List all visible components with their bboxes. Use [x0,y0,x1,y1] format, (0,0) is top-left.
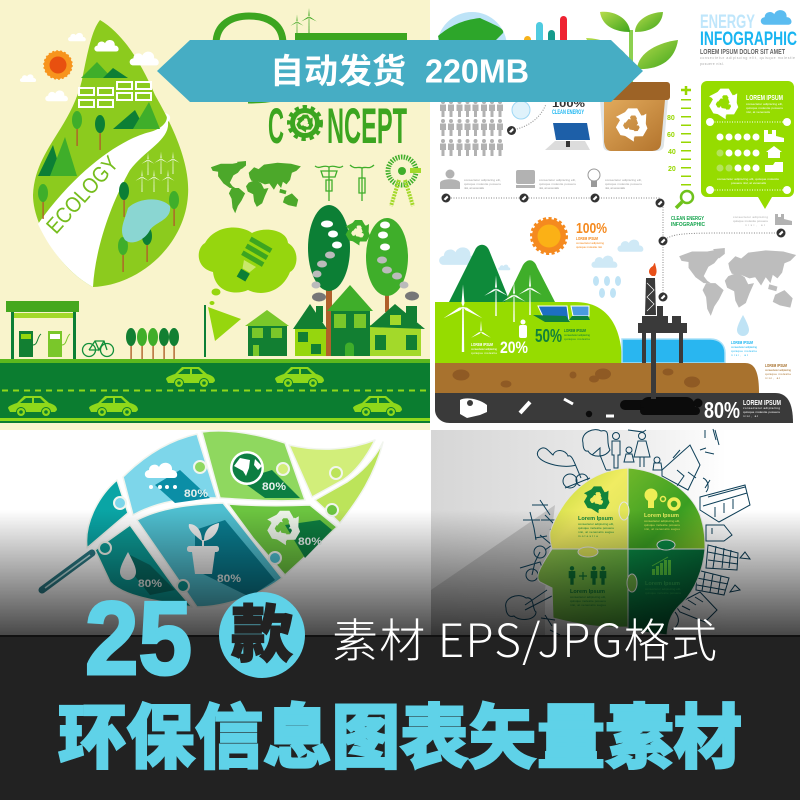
white wind turbines [443,274,542,352]
clouds around leaf [20,33,159,101]
soil caption [765,363,791,380]
leaf long shadows [130,470,332,597]
scale numbers: 40 [668,149,676,156]
icon: earth [230,451,264,485]
icon: computer [516,170,535,188]
dotted timeline [442,194,786,302]
head quadrant: people [538,549,628,627]
small blue globe and connector [507,101,546,135]
panel: puzzle leaf [42,431,383,607]
panel: head puzzle background [431,430,800,640]
leaf piece: teal left [87,480,128,548]
leaf mountains [38,62,160,176]
lorem captions: nisi, at venenatis [464,186,484,190]
icon: energy bulb [231,237,272,285]
dark gradient overlay [0,510,800,636]
oil rig [638,263,687,399]
row of grey icons [440,169,642,190]
leaf solar houses [79,82,151,107]
80 percent callout: 80% [704,397,740,423]
panel: green recycle card: consectetur adipiscing elit, quisque molestie [717,177,779,181]
doodle: building [700,485,750,522]
clean energy figure: 100% [552,99,585,110]
icon: water drop [120,552,136,580]
head cast shadow [431,505,555,640]
lorem captions: quisque molestie posuere [464,182,501,186]
text: lorem ipsum 3: consectetur adipiscing elit, [570,595,606,599]
panel: puzzle leaf background [0,430,431,640]
icon: bulb [588,169,600,187]
recycling pot [600,82,670,151]
100 percent callout: quisque molestie nisi [576,245,602,249]
leaf stem [42,553,92,590]
text: lorem ipsum 3: nisi, at venenatis augue [570,603,606,607]
people pictogram grid [440,100,503,156]
clean energy label [671,216,705,228]
icon: bulb and gears [644,488,679,509]
leaf piece: light blue top [123,434,217,515]
leaf piece: blue center [137,503,282,607]
text: lorem ipsum 3 [570,589,606,607]
text: NCEPT [327,98,407,154]
rig flame [649,263,657,276]
doodle: plant on right [703,478,710,492]
leaf piece: teal bottom [95,525,192,607]
leaf percent labels: 80% [298,536,322,548]
ecology white road [38,113,170,287]
leaf wind turbines [135,152,180,192]
bottom dark band [0,635,800,800]
panel: energy infographic bottom [435,214,796,423]
icon: pot recycle symbol [611,108,652,144]
clean energy label: INFOGRAPHIC [671,222,705,228]
80 percent callout: LOREM IPSUM [743,400,781,407]
100 percent callout: LOREM IPSUM [576,236,598,241]
text: lorem ipsum 4: Lorem Ipsum [645,581,680,587]
road with cars [0,359,430,423]
bicycle [82,341,114,356]
bicycles seen from front [315,165,374,201]
house 1 [245,310,289,356]
50 percent callout: quisque molestie [564,337,590,341]
puzzle tabs [578,502,675,592]
panel: green recycle card [701,81,794,209]
panel: energy infographic top [437,10,797,302]
doodle: solar grids [696,545,750,595]
text: lorem ipsum 1: consectetur adipiscing elit, [578,522,614,526]
icon: person [440,170,460,189]
turbines on GREEN [290,8,317,37]
badge: 款 [219,592,305,678]
house 3 [327,285,373,356]
text: lorem ipsum 3: quisque molestie posuere [570,599,606,603]
panel: green recycle card: nisi, at venenatis [746,110,770,114]
puzzle knobs [99,461,342,592]
doodle: turbines [523,500,555,550]
fuel pump 1 [19,331,41,357]
icon: people plus [569,566,606,585]
factory caption: quisque molestie posuere [733,219,768,223]
doodle: apple tree [583,430,611,470]
water caption [731,340,757,357]
clean energy label: CLEAN ENERGY [671,216,704,222]
card dotted dividers [712,122,785,190]
lorem captions [464,178,642,190]
20 percent callout: 20% [500,338,528,357]
panel: green recycle card: LOREM IPSUM [746,95,783,102]
mountains [449,245,555,302]
lorem captions: consectetur adipiscing elit, [539,178,576,182]
scale numbers: 20 [668,166,676,173]
water caption: quisque molestie [731,349,757,353]
icon: recycle [263,511,305,548]
clean energy figure [545,99,590,150]
lorem captions: quisque molestie posuere [605,182,642,186]
icon: rain cloud [145,463,177,489]
100 percent callout: consectetur adipiscing [576,241,604,245]
GREEN letter tops [295,33,407,41]
light blue clouds [439,240,643,270]
cars [8,367,402,416]
big number 25: 25 [85,581,192,697]
50 percent callout: LOREM IPSUM [564,328,586,333]
leaf percent labels: 80% [217,573,241,585]
lorem captions: quisque molestie posuere [539,182,576,186]
80 percent callout: consectetur adipiscing [743,406,780,410]
panel: green recycle card: consectetur adipiscing elit, [746,102,783,106]
banner text: file size: 220MB [425,52,529,90]
leaf percent labels [138,481,322,590]
20 percent callout: LOREM IPSUM [471,342,493,347]
icon: factory [775,214,792,225]
fossils and bones [460,398,614,418]
text: lorem ipsum 2: consectetur adipiscing elit, [644,519,680,523]
doodle: lower building [672,592,717,630]
water caption: consectetur adipiscing [731,345,757,349]
badge: 款: 款 [231,601,293,670]
heading: ENERGY INFOGRAPHIC: ENERGY [700,12,755,33]
text: lorem ipsum 4: consectetur adipiscing elit, [645,587,681,591]
panel: green recycle card: quisque molestie posuere [746,106,783,110]
solar panels [533,306,590,322]
text: lorem ipsum 1: Lorem Ipsum [578,516,613,522]
windmill [388,157,421,206]
doodle: heart tree [537,448,590,488]
scale numbers: 80 [667,115,675,122]
doodle: family [612,430,662,470]
bar chart icon [524,16,567,46]
leaf percent labels: 80% [138,578,162,590]
card icons factory house truck [764,130,784,172]
soil layer [435,363,759,393]
green hill [435,302,622,363]
panel: green concept background [0,0,430,430]
leaf piece: tip strip [315,442,383,523]
lorem captions: nisi, at venenatis [539,186,560,190]
lorem captions: consectetur adipiscing elit, [605,178,642,182]
flag [204,305,241,357]
icon: head recycle [580,486,613,515]
50 percent callout: consectetur adipiscing [564,333,590,337]
icon: recycle [705,89,742,122]
blue water drop [737,315,749,336]
water caption: nisi, at [731,353,748,357]
factory caption: nisi, at [745,223,765,227]
soil caption: quisque molestie [765,372,791,376]
text: lorem ipsum 1: molestie [578,534,598,538]
text: lorem ipsum 2 [644,513,680,531]
recycling gear [290,108,320,138]
leaf percent labels: 80% [262,481,286,493]
globe [437,12,507,82]
soil caption: LOREM IPSUM [765,363,787,368]
heading: GREEN CONCEPT [216,8,407,154]
smoke puffs [321,220,390,250]
white person [519,320,527,338]
scale numbers: 60 [667,132,675,139]
house 4 [369,304,425,356]
leaf percent labels: 80% [184,488,208,500]
green world map [211,161,301,213]
head quadrant: chart [628,549,705,635]
grey world map [679,248,796,316]
text: lorem ipsum 1 [578,516,614,538]
leaf piece: green top [202,431,305,501]
ECOLOGY road label: ECOLOGY [41,151,123,238]
text: lorem ipsum 1: quisque molestie posuere [578,526,614,530]
factory caption: consectetur adipiscing [733,215,768,219]
gas station [6,301,79,359]
row of small trees [126,328,179,363]
20 percent callout [471,338,528,357]
text: lorem ipsum 4 [645,581,681,595]
bedrock layer [435,393,793,423]
icon: recycle [342,220,373,248]
80 percent callout [704,397,781,423]
doodle: floppy and small device [706,525,732,541]
text: lorem ipsum 1: nisi, at venenatis augue [578,530,614,534]
panel: ecology leaf illustration [20,20,188,287]
letter G arc [216,16,283,100]
card dot ratings [716,134,760,172]
leaf lake [122,199,170,242]
text: lorem ipsum 2: nisi, at venenatis augue [644,527,680,531]
head doodles [506,429,750,635]
text: lorem ipsum 3: Lorem Ipsum [570,589,605,595]
100 percent callout: 100% [576,220,607,237]
doodle: bicycle on left [520,546,546,581]
houses [245,285,425,356]
main title: 环保信息图表矢量素材 [58,699,742,777]
rain drops [593,276,621,298]
subtitle: format: 素材 EPS/JPG格式 [332,605,717,671]
text: lorem ipsum 4: quisque molestie posuere [645,591,681,595]
head quadrant: recycling [550,468,628,549]
head quadrant: bulb [628,468,705,549]
lorem captions: nisi, at venenatis [605,186,626,190]
sun [532,219,566,253]
ecology leaf body [33,20,188,287]
icon: growth chart [652,557,671,575]
heading: ENERGY INFOGRAPHIC: posuere nisl. [700,62,724,66]
water pool [622,339,725,363]
icon: solar panel [545,123,590,150]
50 percent callout [535,326,590,346]
factory caption [733,214,792,227]
100 percent callout [576,220,607,249]
heading: GREEN CONCEPT: C [268,98,284,154]
sun [44,51,72,79]
80 percent callout: nisi, at [743,414,758,418]
water caption: LOREM IPSUM [731,340,753,345]
house 2 [293,304,327,356]
20 percent callout: quisque molestie [471,351,497,355]
soil caption: nisi, at [765,376,780,380]
leaf trees [38,111,179,272]
oil deposit [586,397,702,417]
heading: ENERGY INFOGRAPHIC: consectetur adipiscing elit, quisque molestie [700,56,795,60]
leaf piece: green right [228,504,337,575]
panel: green recycle card: posuere nisl, at venenatis [731,181,766,185]
lorem captions: consectetur adipiscing elit, [464,178,501,182]
panel: energy infographic background [430,0,800,430]
scale ruler [667,86,693,208]
doodle: bottom plants [541,615,560,635]
80 percent callout: quisque molestie posuere [743,410,780,414]
icon: cloud [761,10,791,25]
clean energy figure: CLEAN ENERGY [552,110,584,116]
top blue banner [157,40,643,102]
text: lorem ipsum 2: Lorem Ipsum [644,513,679,519]
icon: magnifier [676,191,693,208]
plant sprout [586,12,678,88]
thought bubble with bulb [199,227,296,305]
leaf piece: yellow green tip [289,440,375,497]
icon: potted plant [187,523,219,574]
soil caption: consectetur adipiscing [765,368,791,372]
text: lorem ipsum 2: quisque molestie posuere [644,523,680,527]
50 percent callout: 50% [535,326,562,346]
fuel pump 2 [48,331,70,357]
panel: puzzle head [431,429,750,640]
banner text: auto delivery: 自动发货 [270,53,406,91]
doodle: house [662,429,719,490]
heading: ENERGY INFOGRAPHIC [700,10,797,66]
scale numbers [667,115,676,173]
doodle: left tree [506,590,552,619]
20 percent callout: consectetur adipiscing [471,347,497,351]
big trees with smoke [308,205,419,356]
